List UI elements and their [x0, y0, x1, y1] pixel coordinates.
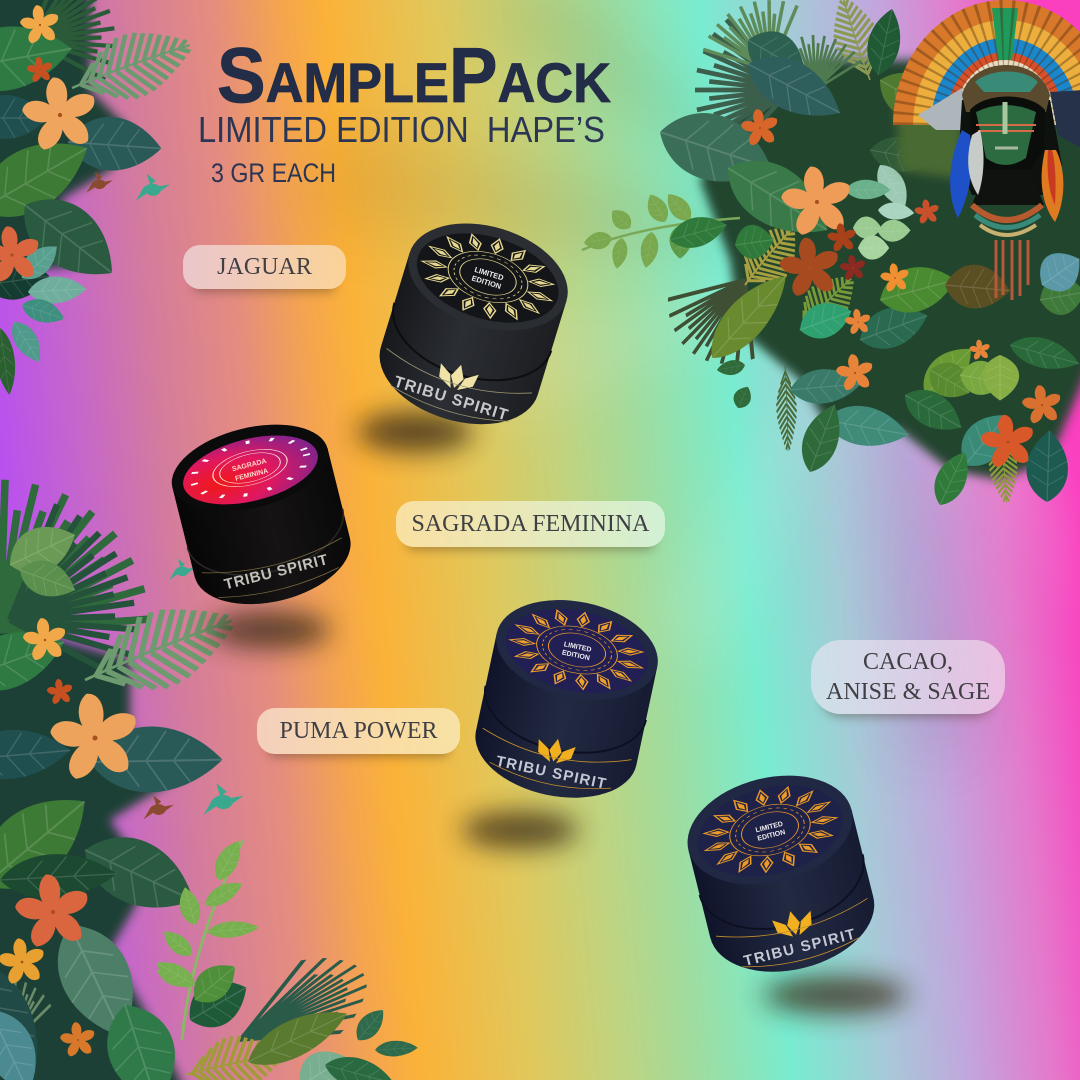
jar: Cacao, Anise and Sage — [676, 759, 886, 988]
logo crystal — [435, 359, 480, 395]
dark hair behind face — [958, 100, 1062, 195]
background palm-shadow rays — [310, 0, 1080, 760]
jungle mass backing — [700, 60, 1080, 480]
side feathers — [950, 130, 1063, 222]
foliage: bottom-left cluster — [0, 443, 418, 1080]
lid text: EDITION — [561, 649, 590, 662]
brand text: TRIBU SPIRIT — [223, 551, 329, 593]
lid text: LIMITED — [473, 265, 505, 282]
bottom-left broad leaves — [0, 514, 418, 1080]
jar: Sagrada Feminina — [163, 410, 361, 619]
label: Cacao, Anise and Sage: CACAO, — [863, 649, 953, 675]
lid text: EDITION — [471, 274, 502, 291]
label: Puma Power: PUMA POWER — [279, 718, 438, 744]
bottom-left flowers — [0, 618, 140, 1058]
lid medallion — [188, 429, 312, 507]
lid text: EDITION — [757, 829, 786, 843]
jar: Jaguar — [366, 205, 581, 442]
top-left palm fronds — [8, 0, 201, 118]
foliage: top-left cluster — [0, 0, 201, 396]
lid text: LIMITED — [755, 821, 784, 834]
hanging green sprig — [582, 188, 740, 270]
lid medallion — [502, 599, 652, 701]
top-right broad leaves — [650, 5, 1080, 511]
logo crystal — [771, 907, 816, 941]
feather headdress — [893, 0, 1080, 150]
drop shadows under jars — [210, 412, 907, 1013]
label: Sagrada Feminina — [396, 501, 665, 547]
lid medallion — [411, 219, 565, 335]
brand text: TRIBU SPIRIT — [494, 753, 607, 793]
logo crystal — [535, 735, 577, 766]
label: Jaguar — [183, 245, 346, 289]
brand text: TRIBU SPIRIT — [742, 926, 857, 970]
subheading: limited edition: LIMITED EDITION HAPE’S — [198, 109, 605, 150]
top-left broad leaves — [0, 16, 163, 396]
neck and beaded necklace — [972, 170, 1044, 300]
lid text: SAGRADA — [231, 458, 267, 473]
title — [198, 31, 611, 188]
top-right palm fronds — [651, 0, 1020, 504]
label: Jaguar: JAGUAR — [217, 254, 312, 280]
indigenous figure with feather headdress — [893, 0, 1080, 300]
painted face — [970, 96, 1045, 178]
headband inlay — [975, 72, 1038, 92]
top-left dark backing — [0, 0, 130, 300]
green sprig — [152, 836, 259, 1040]
top-left flowers — [0, 5, 98, 284]
label: Puma Power — [257, 708, 460, 754]
bottom-left palm fronds — [0, 443, 383, 1080]
top-left birds — [86, 172, 170, 201]
bottom-left dark backing — [0, 610, 190, 1080]
brand text: TRIBU SPIRIT — [392, 374, 510, 424]
bottom-left birds — [144, 559, 244, 819]
top-right flowers — [740, 109, 1062, 470]
foliage: top-right cluster — [582, 0, 1080, 511]
lid medallion — [694, 774, 846, 886]
label: Cacao, Anise and Sage: ANISE & SAGE — [826, 679, 990, 705]
label: Sagrada Feminina: SAGRADA FEMININA — [411, 511, 650, 537]
subheading: weight: 3 GR EACH — [211, 158, 336, 188]
headband — [962, 65, 1050, 112]
heading: Sample Pack: SAMPLEPACK — [217, 31, 611, 119]
label: Cacao, Anise and Sage — [811, 640, 1005, 714]
lid text: FEMININA — [235, 468, 269, 483]
lid text: LIMITED — [563, 641, 592, 654]
jar: Puma Power — [466, 586, 667, 812]
olive leaves under headdress — [895, 90, 965, 180]
